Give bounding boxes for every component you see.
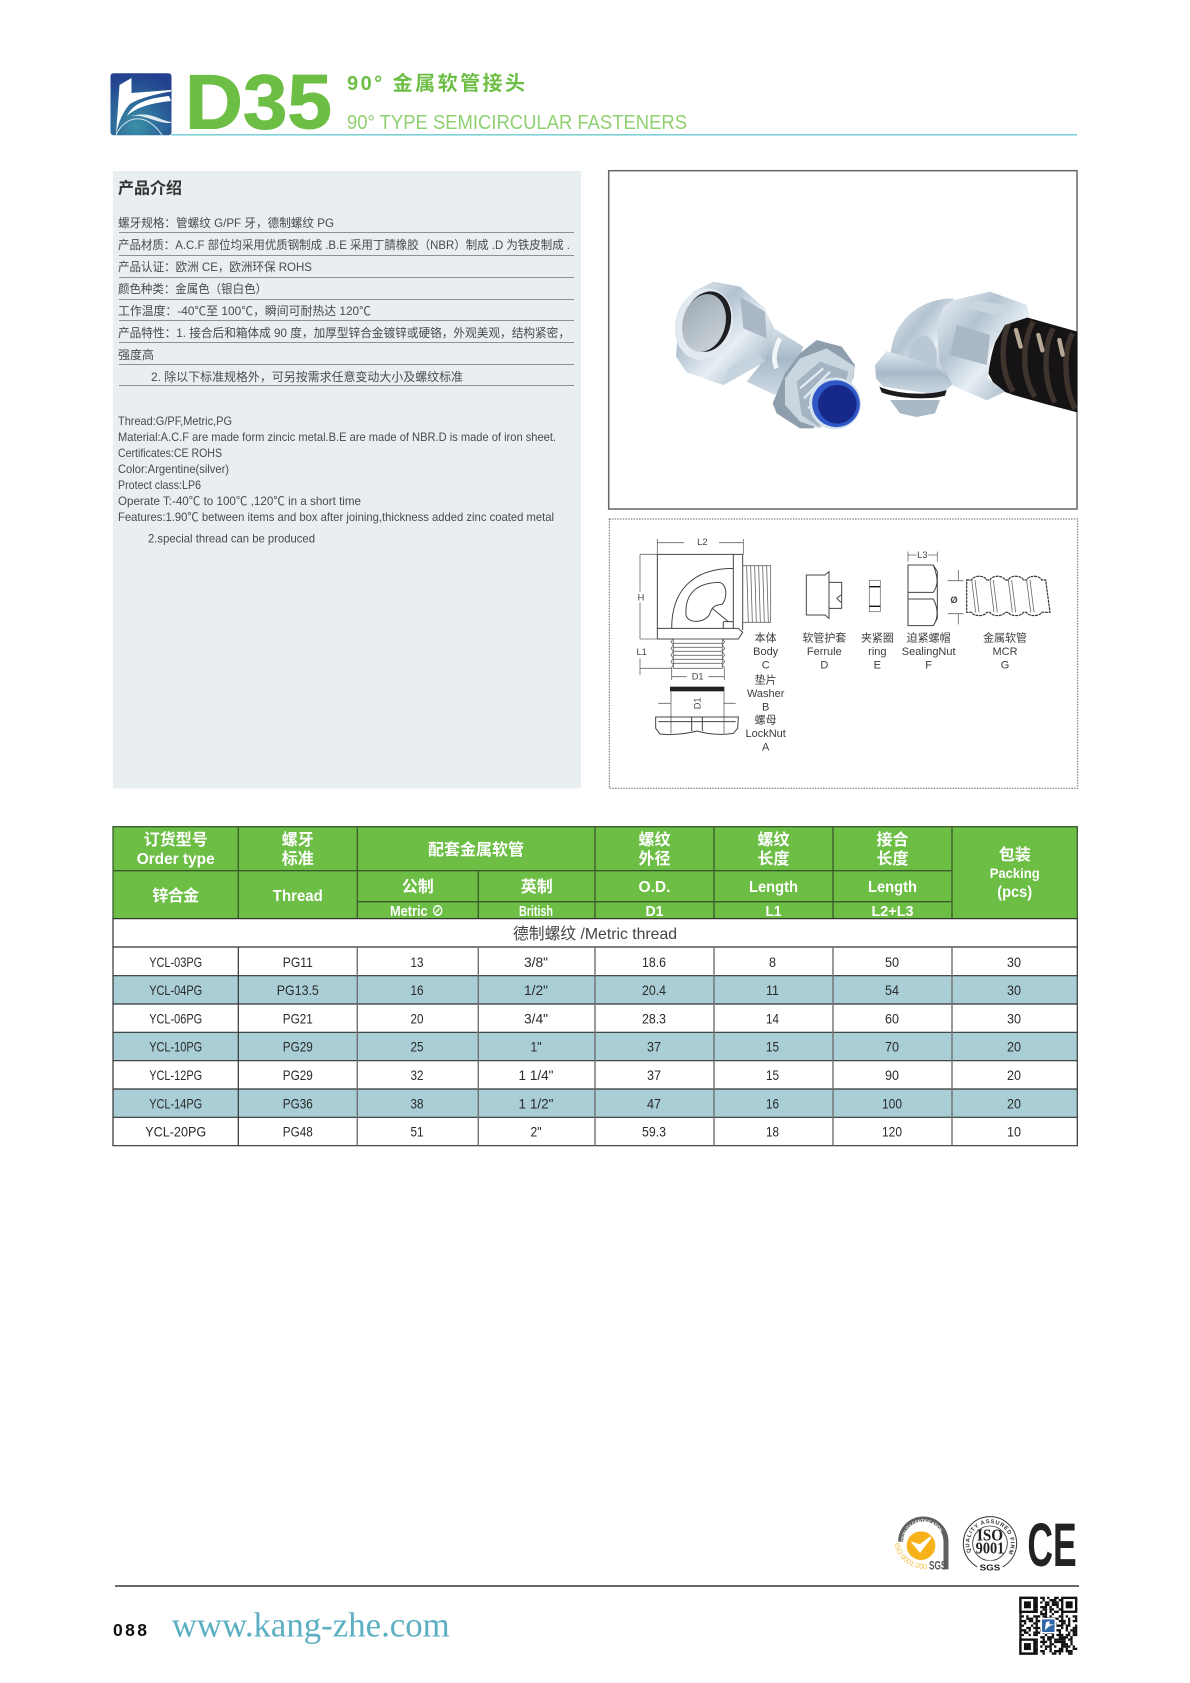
table header: Length	[868, 879, 917, 896]
icon: SGS mark: ISO 9001:2000	[894, 1543, 927, 1570]
row YCL-10PG: 70	[885, 1039, 899, 1055]
row YCL-14PG: 16	[766, 1095, 779, 1111]
English specification list: Protect class:LP6	[118, 478, 201, 492]
Chinese specification list	[118, 215, 574, 386]
table header: 锌合金	[152, 886, 199, 905]
drawing: locknut: D1	[692, 697, 702, 709]
drawing: body with dimensions: L2	[697, 537, 708, 547]
label: sealing nut: 迫紧螺帽	[907, 631, 951, 645]
row YCL-06PG: PG21	[283, 1010, 313, 1026]
label: metal conduit	[983, 631, 1027, 671]
table header: Length	[749, 879, 798, 896]
label: ferrule	[802, 631, 846, 671]
row YCL-04PG: 11	[766, 982, 779, 998]
label: metal conduit: MCR	[992, 646, 1018, 658]
row YCL-04PG: PG13.5	[277, 982, 319, 998]
drawing: metal conduit	[948, 570, 1050, 624]
row YCL-03PG: YCL-03PG	[149, 954, 202, 970]
row YCL-06PG: YCL-06PG	[149, 1010, 202, 1026]
heading: product introduction: 产品介绍	[118, 180, 182, 198]
row YCL-10PG: YCL-10PG	[149, 1039, 202, 1055]
row YCL-12PG	[149, 1067, 1021, 1083]
model number D35: D35	[185, 60, 332, 146]
table header: L2+L3	[872, 903, 914, 920]
table header: Order type	[137, 851, 215, 868]
row YCL-04PG: YCL-04PG	[149, 982, 202, 998]
label: ring: E	[874, 659, 881, 671]
icon: ISO 9001 mark	[962, 1516, 1018, 1573]
icon: ISO 9001 mark: SGS	[980, 1563, 1001, 1573]
row YCL-12PG: PG29	[283, 1067, 313, 1083]
Chinese specification list: 2. 除以下标准规格外，可另按需求任意变动大小及螺纹标准	[151, 369, 463, 384]
drawing: locknut	[656, 692, 738, 735]
Chinese specification list: 产品特性：1. 接合后和箱体成 90 度，加厚型锌合金镀锌或硬铬，外观美观，结构紧密，	[118, 325, 570, 340]
row YCL-04PG	[149, 982, 1021, 998]
table header: 配套金属软管	[428, 840, 524, 859]
row YCL-10PG	[149, 1039, 1021, 1055]
footer rule	[115, 1585, 1079, 1587]
row YCL-12PG: 15	[766, 1067, 779, 1083]
row YCL-06PG: 14	[766, 1010, 779, 1026]
icon: ISO 9001 mark: 9001	[976, 1538, 1004, 1557]
table grid	[113, 919, 1077, 1146]
table header: L1	[766, 903, 782, 920]
row YCL-10PG: 37	[647, 1039, 661, 1055]
English specification list: Certificates:CE ROHS	[118, 446, 222, 460]
title English: 90° TYPE SEMICIRCULAR FASTENERS	[347, 111, 687, 134]
row YCL-14PG: 100	[882, 1095, 902, 1111]
table header: 长度	[876, 849, 909, 868]
Chinese specification list: 颜色种类：金属色（银白色）	[118, 281, 267, 296]
row YCL-04PG: 30	[1007, 982, 1021, 998]
English specification list	[118, 414, 556, 546]
row YCL-03PG	[149, 954, 1021, 970]
row YCL-14PG: PG36	[283, 1095, 313, 1111]
row YCL-14PG: 47	[647, 1095, 661, 1111]
row YCL-03PG: PG11	[283, 954, 313, 970]
table header: Packing	[990, 865, 1040, 881]
row YCL-20PG: 2"	[530, 1124, 542, 1140]
English specification list: Features:1.90℃ between items and box after joining,thickness added zinc coated metal	[118, 510, 554, 524]
section row: metric thread: 德制螺纹 /Metric thread	[513, 925, 677, 943]
drawing: ferrule	[806, 572, 842, 618]
Chinese specification list: 螺牙规格：管螺纹 G/PF 牙，德制螺纹 PG	[118, 215, 334, 230]
row YCL-20PG: 10	[1007, 1124, 1021, 1140]
label: sealing nut	[902, 631, 956, 671]
table header: Metric ⊘	[390, 903, 444, 920]
right elbow fitting with conduit	[875, 292, 1077, 417]
table header: Thread	[273, 888, 323, 905]
labels: body, washer, locknut: Body	[753, 646, 779, 658]
row YCL-04PG: 16	[410, 982, 424, 998]
row YCL-14PG: 20	[1007, 1095, 1021, 1111]
table header: 英制	[521, 878, 553, 896]
row YCL-10PG: 25	[410, 1039, 424, 1055]
row YCL-14PG: YCL-14PG	[149, 1095, 202, 1111]
drawing: body with dimensions: L1	[636, 647, 647, 657]
row YCL-14PG: 1 1/2"	[518, 1095, 554, 1111]
table header: 螺纹	[757, 830, 790, 849]
table header: 长度	[757, 849, 790, 868]
label: ring: ring	[868, 646, 886, 658]
row YCL-20PG: 18	[766, 1124, 779, 1140]
icon: ISO 9001 mark: ISO	[977, 1526, 1003, 1545]
title Chinese: 90° 金属软管接头	[347, 71, 525, 95]
website address: www.kang-zhe.com	[172, 1606, 450, 1645]
row YCL-10PG: PG29	[283, 1039, 313, 1055]
English specification list: Thread:G/PF,Metric,PG	[118, 414, 232, 428]
photo: two elbow fittings	[667, 282, 1077, 438]
row YCL-03PG: 50	[885, 954, 899, 970]
row YCL-06PG: 3/4"	[524, 1010, 548, 1026]
table header: 接合	[876, 830, 909, 849]
label: ferrule: Ferrule	[807, 646, 842, 658]
row YCL-20PG: PG48	[283, 1124, 313, 1140]
drawing: body with dimensions	[636, 537, 771, 681]
row YCL-12PG: YCL-12PG	[149, 1067, 202, 1083]
English specification list: Material:A.C.F are made form zincic metal.B.E are made of NBR.D is made of iron sheet.	[118, 430, 556, 444]
labels: body, washer, locknut: Washer	[747, 688, 785, 700]
row YCL-03PG: 18.6	[642, 954, 666, 970]
row YCL-03PG: 8	[769, 954, 776, 970]
table header: 标准	[282, 850, 314, 868]
label: metal conduit: 金属软管	[983, 631, 1027, 645]
labels: body, washer, locknut: 垫片	[755, 673, 777, 687]
labels: body, washer, locknut: LockNut	[746, 728, 786, 740]
label: ring	[861, 632, 894, 671]
row YCL-14PG	[149, 1095, 1021, 1111]
labels: body, washer, locknut: A	[762, 742, 770, 754]
label: ferrule: D	[820, 659, 828, 671]
row YCL-06PG: 28.3	[642, 1010, 666, 1026]
labels: body, washer, locknut: C	[762, 659, 770, 671]
label: sealing nut: SealingNut	[902, 646, 956, 658]
icon: SGS mark: QUALITY CERTIFICATION	[901, 1519, 942, 1541]
table header: 订货型号	[144, 830, 208, 849]
row YCL-20PG: 59.3	[642, 1124, 666, 1140]
row YCL-10PG: 15	[766, 1039, 779, 1055]
row YCL-20PG	[145, 1124, 1021, 1140]
row YCL-10PG: 20	[1007, 1039, 1021, 1055]
certification marks	[894, 1510, 1077, 1579]
row YCL-12PG: 32	[410, 1067, 424, 1083]
row YCL-04PG: 20.4	[642, 982, 666, 998]
table header: 外径	[638, 849, 671, 868]
row YCL-12PG: 20	[1007, 1067, 1021, 1083]
icon: CE mark: CE	[1027, 1510, 1077, 1579]
icon: SGS mark	[894, 1516, 948, 1572]
row YCL-04PG: 54	[885, 982, 899, 998]
Chinese specification list: 产品材质：A.C.F 部位均采用优质钢制成 .B.E 采用丁腈橡胶（NBR）制成 .D 为铁皮制成 .	[118, 237, 570, 252]
table header: 螺牙	[282, 831, 314, 849]
row YCL-03PG: 3/8"	[524, 954, 548, 970]
icon: ISO 9001 mark: QUALITY ASSURED FIRM	[965, 1519, 1015, 1555]
row YCL-20PG: YCL-20PG	[145, 1124, 206, 1140]
row YCL-10PG: 1"	[530, 1039, 542, 1055]
labels: body, washer, locknut: B	[762, 702, 769, 714]
page number: 088	[113, 1620, 147, 1640]
label: sealing nut: F	[925, 659, 932, 671]
panel: product photo	[609, 171, 1077, 509]
row YCL-04PG: 1/2"	[524, 982, 548, 998]
table header	[113, 827, 1077, 920]
Chinese specification list: 工作温度：-40℃至 100℃，瞬间可耐热达 120℃	[118, 303, 371, 318]
row YCL-06PG: 60	[885, 1010, 899, 1026]
English specification list: Operate T:-40℃ to 100℃ ,120℃ in a short time	[118, 494, 361, 508]
row YCL-03PG: 13	[410, 954, 424, 970]
Chinese specification list: 产品认证：欧洲 CE，欧洲环保 ROHS	[118, 260, 312, 274]
label: ferrule: 软管护套	[802, 631, 846, 645]
drawing: sealing nut: L3	[917, 550, 928, 560]
row YCL-14PG: 38	[410, 1095, 424, 1111]
table header: British	[519, 903, 553, 920]
icon: QR code	[1019, 1598, 1077, 1654]
row YCL-06PG: 30	[1007, 1010, 1021, 1026]
label: metal conduit: G	[1001, 659, 1009, 671]
drawing: clamp ring	[869, 580, 880, 612]
table header: O.D.	[638, 879, 670, 896]
English specification list: 2.special thread can be produced	[148, 532, 315, 546]
table header: D1	[646, 903, 664, 920]
labels: body, washer, locknut: 本体	[755, 631, 777, 645]
labels: body, washer, locknut	[746, 631, 786, 754]
drawing: sealing nut	[908, 550, 937, 626]
drawing: body with dimensions: H	[638, 592, 644, 602]
icon: company logo	[110, 73, 172, 135]
panel: exploded dimension diagram	[609, 519, 1078, 788]
row YCL-06PG	[149, 1010, 1021, 1026]
left elbow fitting	[667, 282, 870, 438]
specification table	[113, 827, 1077, 1146]
row YCL-20PG: 51	[410, 1124, 424, 1140]
icon: SGS mark: SGS	[929, 1558, 946, 1572]
row YCL-06PG: 20	[410, 1010, 424, 1026]
Chinese specification list: 强度高	[118, 347, 154, 362]
row YCL-20PG: 120	[882, 1124, 902, 1140]
row backgrounds	[113, 976, 1077, 1117]
table header: 公制	[402, 878, 434, 896]
labels: body, washer, locknut: 螺母	[755, 714, 777, 727]
English specification list: Color:Argentine(silver)	[118, 462, 229, 476]
row YCL-12PG: 90	[885, 1067, 899, 1083]
drawing: body with dimensions: D1	[692, 671, 704, 681]
table header: (pcs)	[997, 884, 1032, 901]
row YCL-03PG: 30	[1007, 954, 1021, 970]
label: ring: 夹紧圈	[861, 632, 894, 645]
drawing: washer	[670, 687, 724, 691]
header	[110, 60, 1077, 146]
section row: metric thread	[113, 919, 1077, 947]
table header: 包装	[999, 845, 1031, 864]
drawing: metal conduit: Ø	[950, 595, 958, 605]
table header: 螺纹	[638, 830, 671, 849]
row YCL-12PG: 1 1/4"	[518, 1067, 554, 1083]
row YCL-12PG: 37	[647, 1067, 661, 1083]
panel: product introduction	[113, 171, 581, 788]
